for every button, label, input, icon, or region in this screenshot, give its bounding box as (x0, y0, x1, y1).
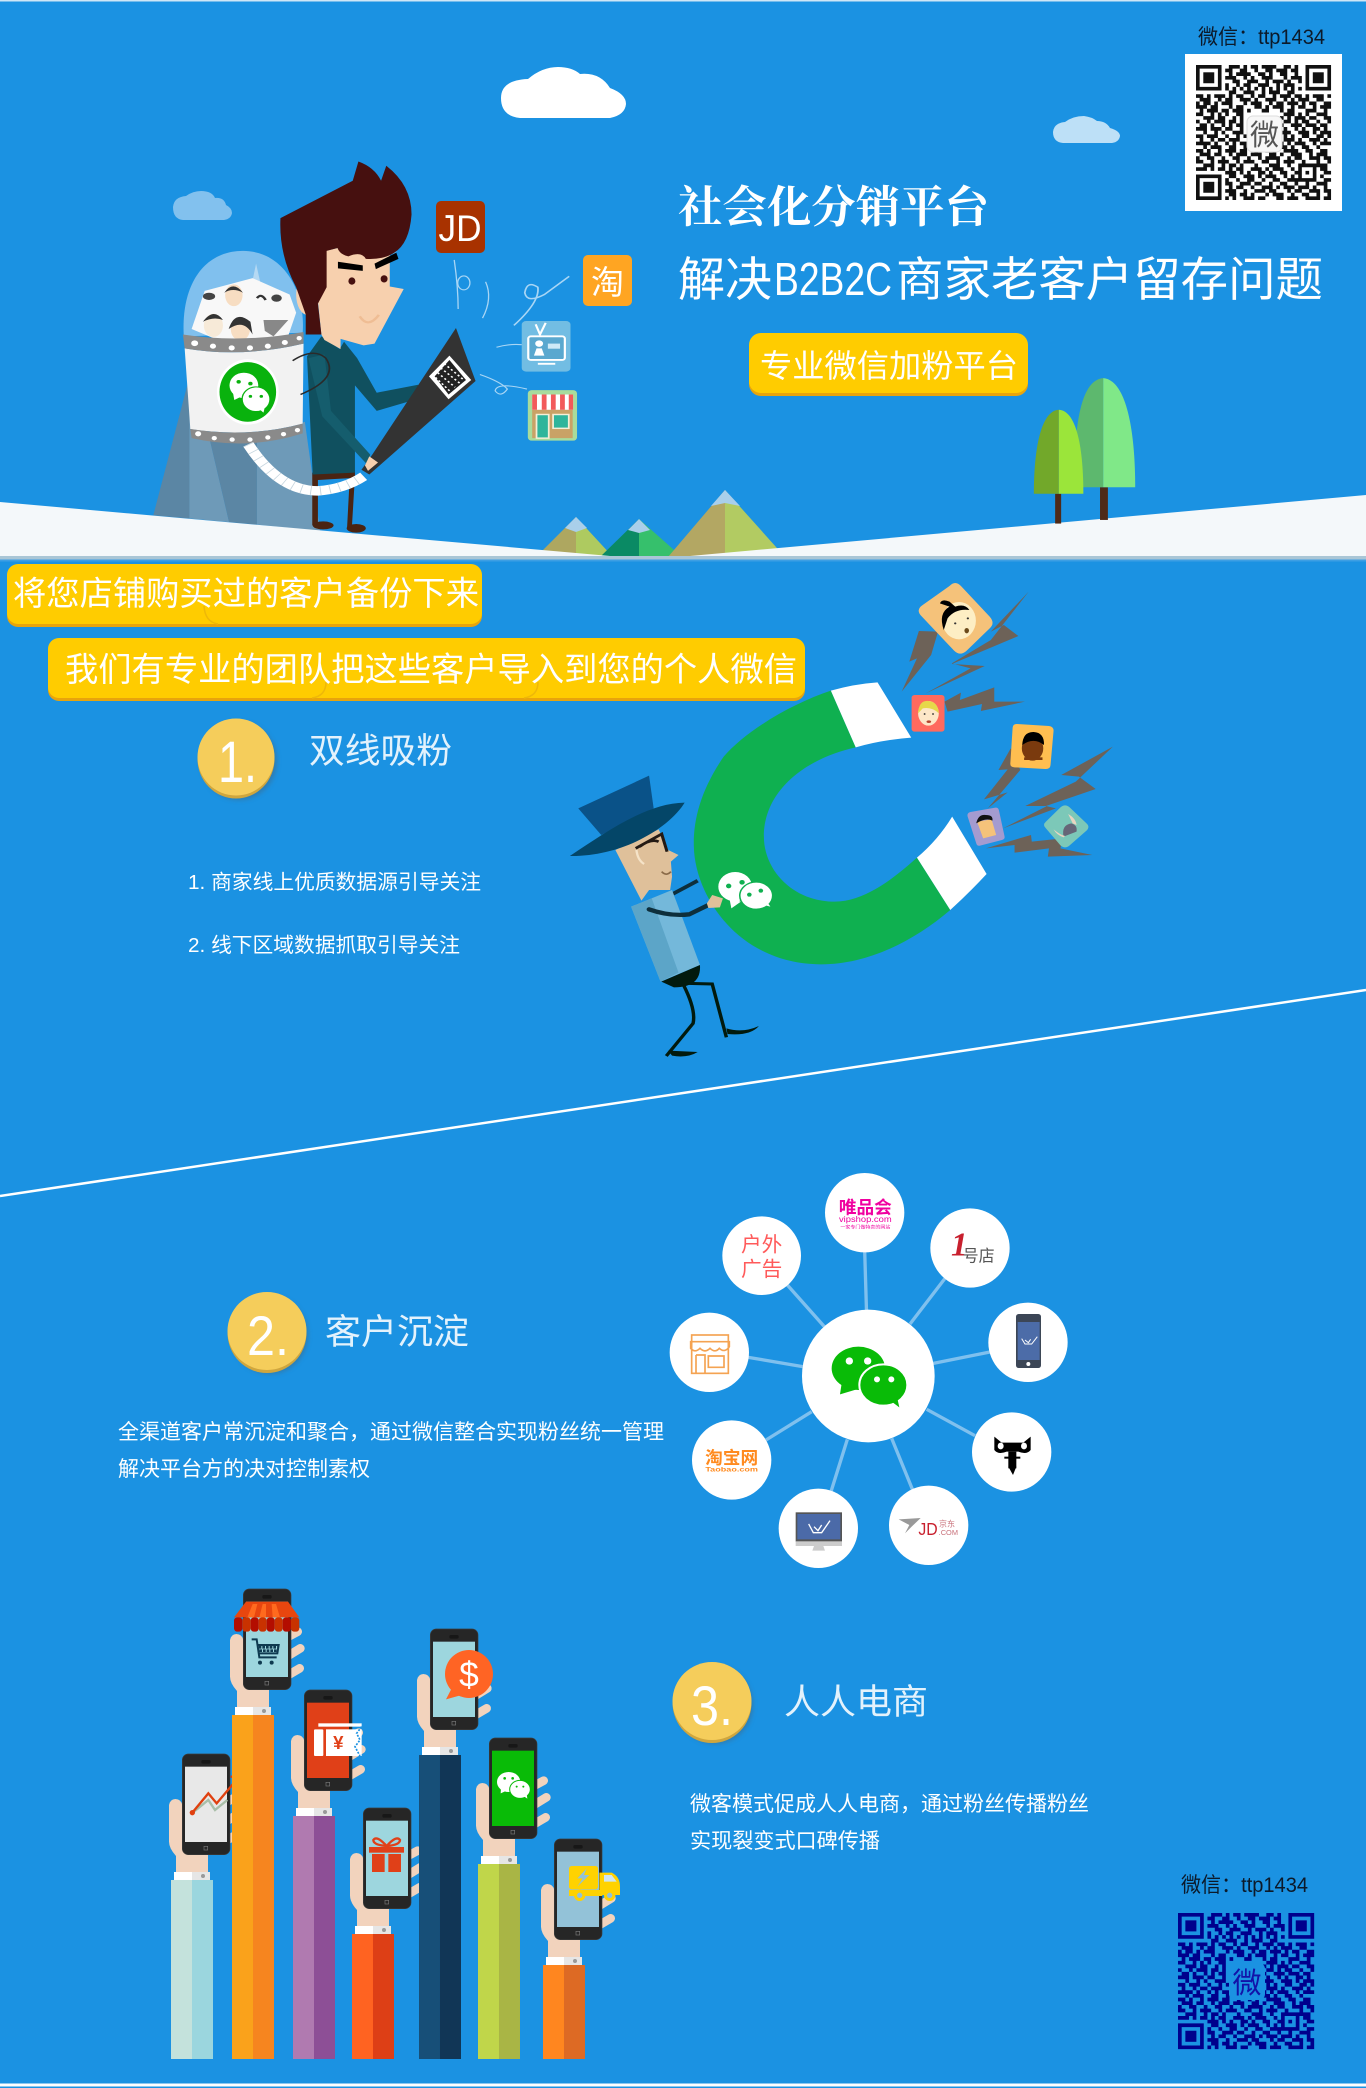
node: Vipshop (825, 1173, 904, 1252)
hand (365, 456, 378, 471)
icon: TV ad (522, 321, 571, 372)
node: desktop (779, 1489, 858, 1568)
rocket dome (184, 251, 303, 336)
diagonal divider (0, 990, 1366, 1196)
step 1 number badge (198, 718, 277, 800)
node: outdoor advertising: 广告 (741, 1258, 782, 1281)
arm 7: delivery truck (541, 1839, 620, 2059)
arm 3: coupon (291, 1690, 362, 2059)
subtitle: 解决 (678, 253, 772, 306)
step 1 number badge: 1. (218, 730, 257, 795)
step 3 number badge (672, 1662, 753, 1744)
rocket bottom band (190, 424, 303, 444)
follower cards in dome (192, 264, 296, 344)
step 1 heading: 双线吸粉 (309, 732, 452, 771)
node: Vipshop: 一家专门做特卖的网站 (840, 1223, 891, 1230)
arm 3: coupon: ¥ (333, 1732, 344, 1753)
eyebrows and eyes (338, 253, 398, 322)
arm 5: dollar bubble (417, 1629, 493, 2059)
step 2 number badge (228, 1292, 308, 1374)
tile: man on purple (967, 808, 1005, 846)
rocket body (185, 344, 304, 433)
node: JD: 京东 (939, 1519, 955, 1529)
arm 5: dollar bubble: $ (459, 1656, 479, 1695)
node: outdoor advertising: 户外 (741, 1234, 782, 1257)
step 3 number badge: 3. (691, 1674, 733, 1737)
node: Taobao: Taobao.com (705, 1468, 758, 1474)
magnet tip top (831, 682, 911, 747)
man: face (615, 829, 679, 901)
face (318, 248, 404, 349)
button: professional WeChat followers platform: 专业微信加粉平台 (760, 348, 1018, 384)
WeChat bubbles (718, 872, 773, 909)
WeChat ID top: 微信：ttp1434 (1198, 26, 1325, 49)
arm 6: WeChat (476, 1738, 546, 2059)
step 2 body text: 全渠道客户常沉淀和聚合，通过微信整合实现粉丝统一管理 (118, 1421, 664, 1444)
icon: JD: JD (438, 208, 482, 249)
step 3 body text (690, 1793, 1089, 1853)
man: legs (666, 983, 726, 1056)
banner: import customers (48, 638, 805, 701)
step 1 list (188, 871, 481, 957)
icon: Taobao: 淘 (591, 264, 624, 301)
cloud: small left (173, 191, 232, 220)
man: hand (707, 895, 723, 908)
node: Taobao (692, 1420, 771, 1500)
step 3 heading: 人人电商 (784, 1683, 928, 1722)
QR code bottom: 微 (1232, 1967, 1262, 2000)
tile: dark-skinned man (1010, 724, 1054, 769)
arm (308, 355, 370, 465)
cloud: small right (1053, 116, 1120, 143)
subtitle: B2B2C (774, 253, 892, 305)
tile: viking helmet (1044, 805, 1088, 847)
icon: Taobao (583, 255, 632, 306)
legs (312, 470, 355, 527)
man: pants (661, 965, 700, 987)
main title: 社会化分销平台 (678, 183, 991, 232)
subtitle (678, 253, 1323, 306)
node: Taobao: 淘宝网 (705, 1447, 758, 1468)
man: coat (631, 890, 700, 982)
node: Vipshop: vipshop.com (839, 1215, 892, 1224)
center hub circle (802, 1310, 935, 1442)
node: Yihaodian (930, 1208, 1010, 1288)
arm 2: shop cart (230, 1589, 300, 2059)
hub diagram: channels connected to WeChat (670, 1173, 1068, 1568)
QR code bottom (1178, 1915, 1314, 2047)
step 2 heading: 客户沉淀 (325, 1313, 469, 1352)
banner: back up customers (7, 564, 482, 627)
arm 4: gift (350, 1808, 420, 2059)
magnet with man and attracted followers (570, 583, 1113, 1056)
WeChat ID bottom: 微信：ttp1434 (1181, 1874, 1308, 1897)
step 2 number badge: 2. (247, 1304, 289, 1367)
man: glasses (636, 834, 667, 852)
banner: import customers: 我们有专业的团队把这些客户导入到您的个人微信 (65, 652, 797, 689)
backpack strap (293, 353, 329, 395)
step 3 body text: 实现裂变式口碑传播 (690, 1830, 880, 1853)
QR code top (1185, 54, 1342, 211)
QR code top: 微 (1250, 119, 1279, 152)
man: far arm (671, 881, 698, 895)
rocket top band (183, 332, 304, 352)
node: mobile (988, 1303, 1068, 1382)
lightning bolts (902, 592, 1113, 857)
man: near arm (649, 905, 708, 915)
tile: blonde girl (912, 695, 945, 732)
QR card (361, 328, 476, 474)
character with WeChat rocket and QR card (183, 161, 476, 533)
wechat badge (217, 359, 279, 425)
raised hands holding phones (169, 1589, 620, 2059)
node: Vipshop: 唯品会 (839, 1197, 892, 1217)
node: JD (889, 1486, 968, 1565)
node: Yihaodian: 号店 (963, 1247, 995, 1266)
hair (280, 161, 412, 335)
trees (1034, 378, 1135, 524)
banner: back up customers: 将您店铺购买过的客户备份下来 (13, 576, 479, 613)
cloud: large white (501, 67, 626, 118)
snowy hill (0, 495, 1366, 557)
node: store (670, 1313, 749, 1392)
mountains (541, 490, 785, 557)
magnet body (694, 691, 950, 964)
connector lines (748, 1250, 990, 1492)
step 1 list: 2. 线下区域数据抓取引导关注 (188, 934, 460, 957)
step 2 body text: 解决平台方的决对控制素权 (118, 1458, 370, 1481)
tile: woman with bun (919, 583, 993, 654)
man: hat (570, 776, 685, 856)
node: Yihaodian: 1 (951, 1227, 968, 1264)
swirl lines (454, 260, 569, 394)
icon: shop (528, 390, 577, 441)
step 3 body text: 微客模式促成人人电商，通过粉丝传播粉丝 (690, 1793, 1089, 1816)
subtitle: 商家老客户留存问题 (896, 253, 1323, 306)
arm 1: chart (169, 1754, 240, 2059)
magnet tip bottom (917, 817, 987, 910)
node: outdoor advertising (722, 1216, 801, 1295)
button: professional WeChat followers platform (749, 333, 1028, 396)
node: JD: .COM (939, 1528, 958, 1537)
ear (296, 274, 319, 315)
node: Tmall (972, 1412, 1051, 1492)
exhaust tube (248, 444, 364, 491)
node: JD: JD (918, 1519, 938, 1539)
torso (307, 336, 420, 474)
step 2 body text (118, 1421, 664, 1481)
rocket exhaust smoke (153, 385, 320, 531)
step 1 list: 1. 商家线上优质数据源引导关注 (188, 871, 481, 894)
